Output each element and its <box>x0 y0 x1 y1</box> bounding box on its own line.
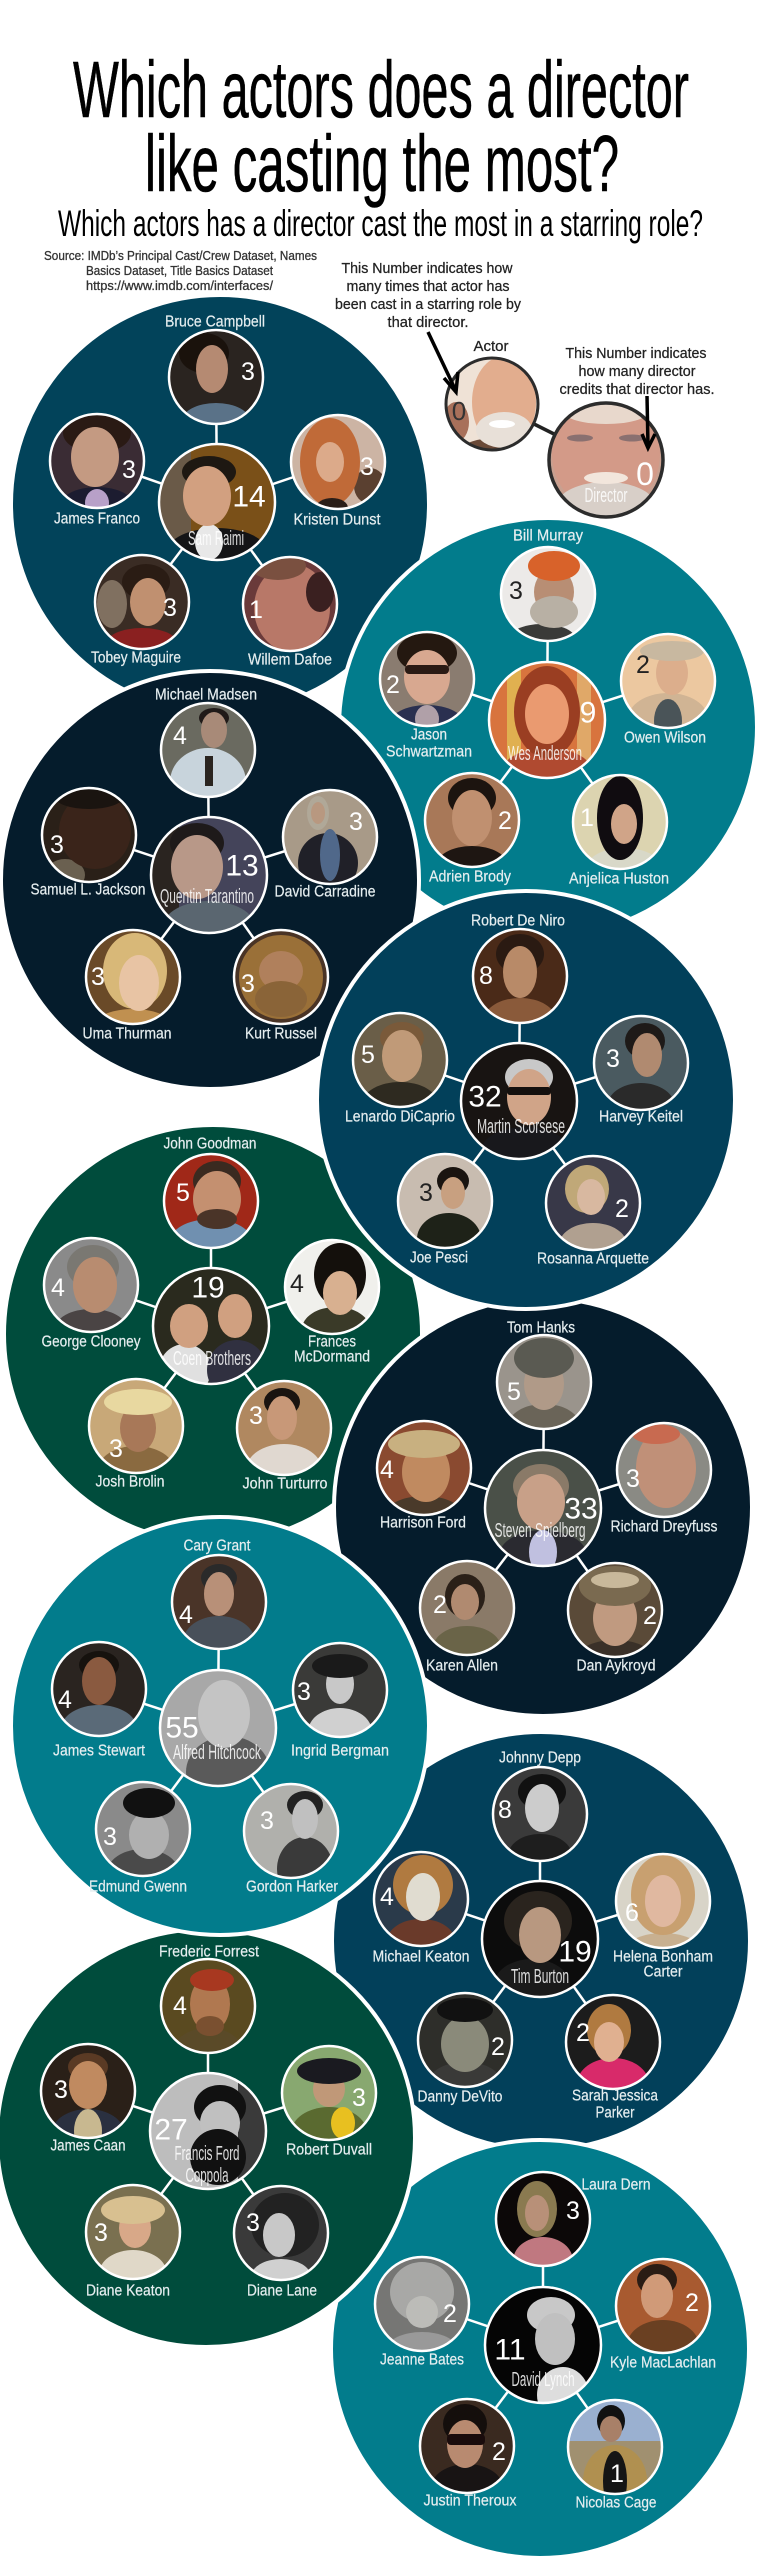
actor: Josh Brolin: 3 <box>109 1435 123 1463</box>
actor: Willem Dafoe <box>240 552 340 654</box>
actor: Cary Grant <box>169 1552 269 1668</box>
actor: Justin Theroux <box>417 2396 517 2512</box>
legend director portrait <box>547 401 665 519</box>
actor: Sarah Jessica Parker: 2 <box>576 2019 590 2047</box>
connectors <box>89 750 330 977</box>
actor: Michael Madsen <box>160 702 256 798</box>
actor: Adrien Brody: 2 <box>498 807 512 835</box>
actor labels <box>53 1538 389 1896</box>
legend note: actor number: been cast in a starring role by <box>335 297 522 313</box>
actor labels: Justin Theroux <box>424 2492 517 2510</box>
actor labels: Lenardo DiCaprio <box>345 1108 455 1126</box>
actor: Helena Bonham Carter <box>613 1851 713 1965</box>
actor: Diane Lane <box>231 2183 331 2295</box>
actor: Bruce Campbell: 3 <box>241 358 255 386</box>
actor labels: McDormand <box>294 1348 370 1366</box>
actor: Robert Duvall <box>279 2043 379 2159</box>
actor: Tobey Maguire: 3 <box>163 594 177 622</box>
actor labels <box>50 1944 372 2300</box>
actor labels: Harrison Ford <box>380 1514 466 1532</box>
actor: Owen Wilson: 2 <box>636 651 650 679</box>
connectors <box>99 1602 340 1831</box>
director: Coen Brothers: 19 <box>191 1272 225 1304</box>
actor: Diane Keaton: 3 <box>94 2219 108 2247</box>
actor labels: Adrien Brody <box>429 868 511 886</box>
actor: Jason Schwartzman <box>378 630 476 728</box>
actor: Laura Dern <box>493 2169 593 2285</box>
actor: Ingrid Bergman: 3 <box>297 1678 311 1706</box>
director: Quentin Tarantino <box>150 816 268 934</box>
director: Alfred Hitchcock: Alfred Hitchcock <box>173 1742 262 1764</box>
director: Francis Ford Coppola: 27 <box>154 2114 188 2146</box>
director: Francis Ford Coppola: Coppola <box>186 2165 229 2187</box>
actor: Kurt Russel: 3 <box>241 970 255 998</box>
actor: Frances McDormand <box>284 1238 380 1336</box>
director: David Lynch: 11 <box>494 2334 526 2366</box>
actor labels <box>54 314 381 668</box>
connectors <box>427 594 668 822</box>
actor: Harrison Ford <box>376 1420 472 1516</box>
actor: Uma Thurman: 3 <box>91 963 105 991</box>
actor: James Stewart: 4 <box>58 1686 72 1714</box>
director: Wes Anderson: Wes Anderson <box>508 743 582 765</box>
actor labels: Owen Wilson <box>624 730 706 746</box>
actor: George Clooney <box>42 1236 140 1334</box>
director: Sam Raimi <box>158 442 276 562</box>
actor labels: Samuel L. Jackson <box>30 882 146 898</box>
actor labels: Gordon Harker <box>246 1878 338 1896</box>
panel: Martin Scorsese <box>317 891 735 1309</box>
actor: Samuel L. Jackson: 3 <box>50 831 64 859</box>
actor: Frances McDormand: 4 <box>290 1270 304 1298</box>
actor: Joe Pesci: 3 <box>419 1179 433 1207</box>
actor: Justin Theroux: 2 <box>492 2438 506 2466</box>
actor: Edmund Gwenn: 3 <box>103 1823 117 1851</box>
actor: Tom Hanks <box>496 1334 592 1430</box>
director: Coen Brothers: Coen Brothers <box>173 1348 251 1370</box>
actor: Anjelica Huston: 1 <box>580 804 594 832</box>
actor: Gordon Harker: 3 <box>260 1807 274 1835</box>
legend director portrait: Director <box>584 485 628 507</box>
director: Francis Ford Coppola: Francis Ford <box>174 2143 240 2165</box>
actor labels: John Goodman <box>164 1136 256 1152</box>
legend director portrait: 0 <box>636 456 654 492</box>
source note: Source: IMDb’s Principal Cast/Crew Dataset, Names <box>44 248 317 263</box>
actor labels: Sarah Jessica <box>572 2088 658 2104</box>
director: Francis Ford Coppola <box>148 2071 268 2191</box>
actor: Nicolas Cage: 1 <box>610 2460 624 2488</box>
actor labels: Jeanne Bates <box>380 2352 464 2368</box>
actor labels: Helena Bonham <box>613 1948 713 1966</box>
actor labels: Edmund Gwenn <box>89 1878 187 1896</box>
legend actor label: Actor <box>474 339 509 355</box>
actor: Edmund Gwenn <box>93 1779 193 1897</box>
connectors <box>421 1814 663 2042</box>
actor labels: James Caan <box>50 2138 126 2154</box>
actor: Anjelica Huston <box>572 774 668 870</box>
actor labels: Nicolas Cage <box>576 2494 656 2512</box>
actor labels: George Clooney <box>42 1334 141 1350</box>
legend note: actor number: that director. <box>388 315 468 331</box>
actor: Bruce Campbell <box>168 328 264 426</box>
actor: Lenardo DiCaprio <box>352 1012 448 1108</box>
director: Steven Spielberg: 33 <box>564 1492 598 1526</box>
actor labels: Diane Lane <box>247 2282 317 2300</box>
actor labels: Harvey Keitel <box>599 1108 683 1126</box>
source note: Basics Dataset, Title Basics Dataset <box>86 263 273 278</box>
actor labels: Schwartzman <box>386 744 472 760</box>
source note: https://www.imdb.com/interfaces/ <box>86 278 273 293</box>
actor labels: Cary Grant <box>184 1538 251 1554</box>
director: Wes Anderson: 9 <box>580 696 596 730</box>
actor labels <box>380 1320 718 1674</box>
actor: Joe Pesci <box>395 1151 495 1265</box>
actor labels: Bruce Campbell <box>165 314 265 330</box>
actor: Willem Dafoe: 1 <box>249 596 263 624</box>
actor labels: Kyle MacLachlan <box>610 2354 716 2372</box>
actor: John Turturro <box>236 1380 332 1476</box>
actor labels: Ingrid Bergman <box>291 1742 389 1760</box>
actor: Michael Keaton <box>371 1849 471 1963</box>
panel: Steven Spielberg <box>334 1298 752 1716</box>
actor labels <box>386 528 706 888</box>
director: Alfred Hitchcock: 55 <box>165 1712 199 1744</box>
actor: Frederic Forrest <box>158 1956 258 2072</box>
actor: Jeanne Bates <box>372 2254 472 2364</box>
arrow: to director number <box>642 396 655 448</box>
actor labels <box>380 2176 716 2512</box>
director: Quentin Tarantino: Quentin Tarantino <box>160 886 254 908</box>
actor: Kyle MacLachlan: 2 <box>685 2289 699 2317</box>
director: David Lynch: David Lynch <box>512 2369 574 2391</box>
actor labels: David Carradine <box>274 884 376 900</box>
actor labels: Diane Keaton <box>86 2282 170 2300</box>
director: Alfred Hitchcock <box>158 1668 278 1808</box>
connectors <box>91 1201 332 1428</box>
actor: Dan Aykroyd <box>566 1562 664 1658</box>
actor labels: James Stewart <box>53 1742 146 1760</box>
panel: Wes Anderson <box>339 518 757 936</box>
connectors <box>424 1382 664 1610</box>
actor: James Franco <box>48 412 146 510</box>
panel: Quentin Tarantino <box>1 671 419 1089</box>
actor: Tobey Maguire <box>94 554 190 650</box>
panel: Coen Brothers <box>4 1125 422 1543</box>
actor labels: Parker <box>596 2104 634 2122</box>
actor: Robert De Niro: 8 <box>479 962 493 990</box>
legend actor portrait <box>444 356 540 452</box>
actor: Bill Murray <box>500 546 596 642</box>
actor labels: Bill Murray <box>513 528 583 544</box>
actor: James Caan <box>38 2041 138 2157</box>
actor: Diane Lane: 3 <box>246 2209 260 2237</box>
director: Steven Spielberg: Steven Spielberg <box>494 1520 586 1542</box>
director: Quentin Tarantino: 13 <box>225 850 259 882</box>
director: Tim Burton: 19 <box>558 1936 592 1968</box>
director: Tim Burton: Tim Burton <box>511 1966 569 1988</box>
panel: David Lynch <box>331 2140 749 2556</box>
director: Martin Scorsese <box>459 1041 579 1175</box>
legend note: director number: how many director <box>578 364 696 380</box>
actor: James Caan: 3 <box>54 2076 68 2104</box>
arrow: to actor number <box>428 332 458 392</box>
actor: Bill Murray: 3 <box>509 577 523 605</box>
actor labels <box>42 1136 370 1492</box>
actor labels: Uma Thurman <box>82 1026 172 1042</box>
legend note: actor number: many times that actor has <box>346 279 510 295</box>
panel: Sam Raimi <box>11 295 429 713</box>
legend actor portrait: 0 <box>452 396 466 426</box>
legend connector <box>534 424 556 435</box>
actor: John Turturro: 3 <box>249 1402 263 1430</box>
actor: Sarah Jessica Parker <box>563 1992 663 2110</box>
actor: Rosanna Arquette <box>543 1153 643 1267</box>
actor: Kyle MacLachlan <box>613 2256 713 2372</box>
actor: Diane Keaton <box>83 2182 183 2298</box>
legend note: director number: credits that director has. <box>560 382 714 398</box>
actor: James Stewart <box>49 1639 149 1753</box>
actor: Richard Dreyfuss <box>614 1420 714 1520</box>
actor: Helena Bonham Carter: 6 <box>625 1899 639 1927</box>
director: Sam Raimi: 14 <box>232 480 266 514</box>
actor: David Carradine: 3 <box>349 808 363 836</box>
director: Wes Anderson <box>488 660 606 780</box>
actor labels: Robert De Niro <box>471 912 565 930</box>
actor: Robert De Niro <box>472 928 568 1024</box>
director: Steven Spielberg <box>484 1448 602 1568</box>
actor: Gordon Harker <box>241 1781 341 1901</box>
actor labels: Laura Dern <box>582 2176 650 2194</box>
connectors <box>400 976 641 1203</box>
actor labels: Anjelica Huston <box>569 870 669 888</box>
actor labels: Michael Madsen <box>155 686 257 704</box>
director: Sam Raimi: Sam Raimi <box>188 528 244 550</box>
director: Coen Brothers <box>152 1266 270 1386</box>
actor: David Carradine <box>282 788 378 886</box>
panel: Tim Burton <box>332 1732 750 2150</box>
actor labels: Dan Aykroyd <box>576 1658 656 1674</box>
actor: Jason Schwartzman: 2 <box>386 671 400 699</box>
director: Martin Scorsese: 32 <box>468 1080 502 1114</box>
source note <box>44 248 317 293</box>
director: Martin Scorsese: Martin Scorsese <box>477 1116 565 1138</box>
panel: Alfred Hitchcock <box>11 1517 429 1935</box>
actor labels <box>30 686 376 1042</box>
actor labels: Frances <box>308 1334 356 1350</box>
actor: Robert Duvall: 3 <box>352 2084 366 2112</box>
actor: Danny DeVito: 2 <box>491 2033 505 2061</box>
actor: Cary Grant: 4 <box>179 1601 193 1629</box>
actor labels: Karen Allen <box>426 1658 498 1674</box>
actor: Richard Dreyfuss: 3 <box>626 1465 640 1493</box>
actor labels: Richard Dreyfuss <box>610 1518 718 1536</box>
actor: George Clooney: 4 <box>51 1274 65 1302</box>
panel: Francis Ford Coppola <box>0 1929 415 2347</box>
connectors <box>88 2006 329 2233</box>
actor: Harrison Ford: 4 <box>380 1456 394 1484</box>
actor labels: Robert Duvall <box>286 2142 372 2158</box>
actor: Johnny Depp: 8 <box>498 1796 512 1824</box>
actor labels: Carter <box>644 1964 682 1980</box>
actor: Laura Dern: 3 <box>566 2197 580 2225</box>
actor labels: Josh Brolin <box>96 1474 164 1490</box>
actor: Josh Brolin <box>88 1378 184 1474</box>
actor labels: John Turturro <box>242 1476 328 1492</box>
actor labels: Joe Pesci <box>410 1250 468 1266</box>
actor: Harvey Keitel <box>591 1013 691 1131</box>
director: Tim Burton <box>480 1879 600 2011</box>
actor: Tom Hanks: 5 <box>507 1378 521 1406</box>
legend note: actor number: This Number indicates how <box>342 261 513 277</box>
connectors <box>422 2219 663 2447</box>
actor: Frederic Forrest: 4 <box>173 1992 187 2020</box>
connectors <box>97 377 338 604</box>
actor: Ingrid Bergman <box>290 1640 390 1756</box>
actor labels: Frederic Forrest <box>159 1944 260 1960</box>
actor: Owen Wilson <box>620 632 716 730</box>
actor labels: Kristen Dunst <box>294 512 381 528</box>
legend note: actor number <box>335 261 522 331</box>
actor: Karen Allen <box>418 1560 516 1656</box>
actor labels: Tom Hanks <box>507 1320 575 1336</box>
actor: Michael Keaton: 4 <box>380 1883 394 1911</box>
actor: Samuel L. Jackson <box>40 786 138 884</box>
actor: Uma Thurman <box>84 928 182 1026</box>
actor labels: Kurt Russel <box>245 1026 317 1042</box>
actor: Rosanna Arquette: 2 <box>615 1195 629 1223</box>
legend note: director number: This Number indicates <box>566 346 706 362</box>
actor: Adrien Brody <box>424 772 520 868</box>
title <box>73 45 689 208</box>
actor: Harvey Keitel: 3 <box>606 1045 620 1073</box>
legend note: director number <box>560 346 714 398</box>
actor labels: Johnny Depp <box>499 1750 581 1766</box>
actor labels: Michael Keaton <box>372 1948 470 1966</box>
actor: Jeanne Bates: 2 <box>443 2300 457 2328</box>
director: David Lynch <box>483 2285 603 2423</box>
actor labels: Willem Dafoe <box>248 652 332 668</box>
actor: James Franco: 3 <box>122 456 136 484</box>
actor labels: Tobey Maguire <box>91 650 181 666</box>
actor labels: Danny DeVito <box>418 2088 502 2106</box>
actor: Kristen Dunst: 3 <box>360 453 374 481</box>
actor: Danny DeVito <box>415 1990 515 2102</box>
actor: John Goodman: 5 <box>176 1179 190 1207</box>
actor: Nicolas Cage <box>565 2397 665 2517</box>
actor labels: Rosanna Arquette <box>537 1250 649 1268</box>
actor: Johnny Depp <box>490 1764 590 1878</box>
actor labels: Jason <box>411 726 447 744</box>
actor labels <box>372 1750 713 2122</box>
actor: Michael Madsen: 4 <box>173 722 187 750</box>
actor: John Goodman <box>162 1152 260 1250</box>
actor: Kurt Russel <box>231 927 331 1027</box>
actor labels <box>345 912 683 1268</box>
actor labels: James Franco <box>54 510 140 528</box>
actor: Karen Allen: 2 <box>433 1591 447 1619</box>
actor: Dan Aykroyd: 2 <box>643 1602 657 1630</box>
actor: Kristen Dunst <box>290 414 386 510</box>
actor: Lenardo DiCaprio: 5 <box>361 1041 375 1069</box>
